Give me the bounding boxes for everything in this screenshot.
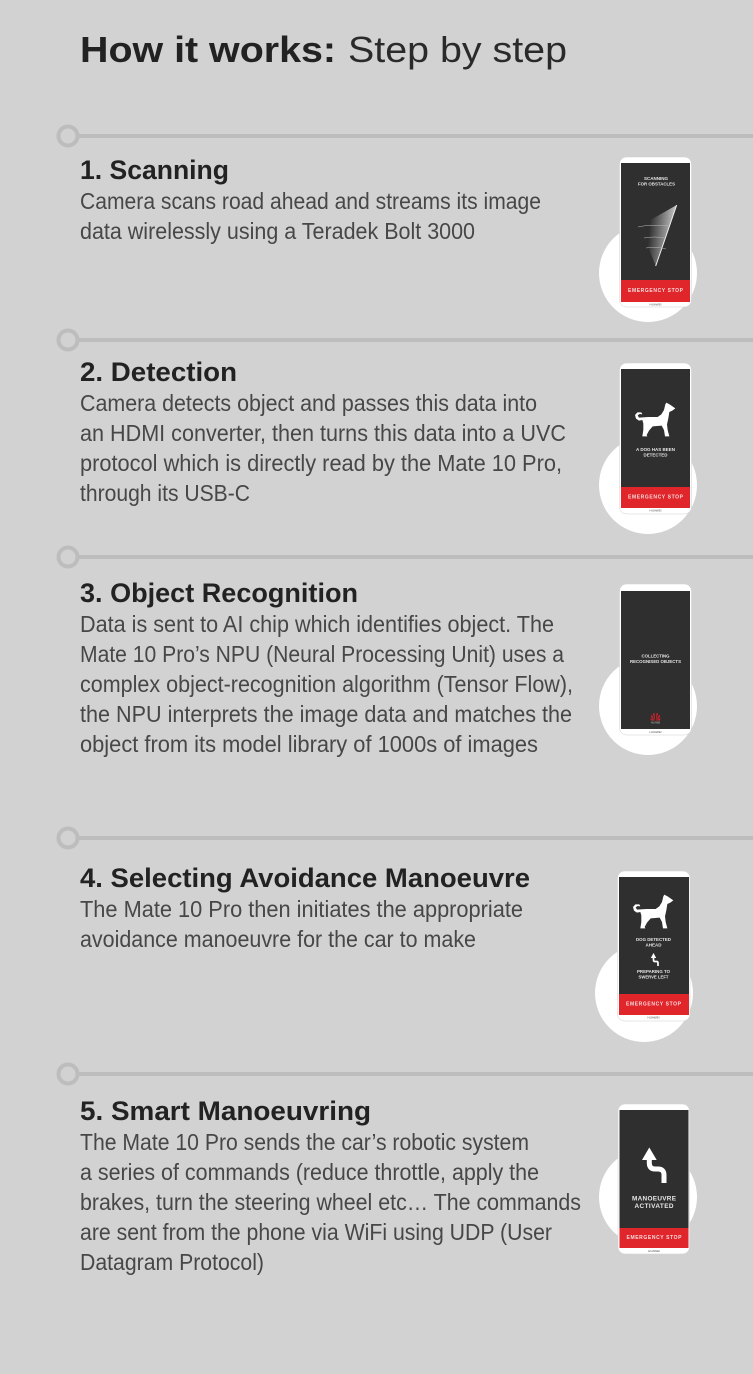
text block: step 2: through its USB-C xyxy=(80,480,250,506)
heading: 5. Smart Manoeuvring: 5. Smart Manoeuvring xyxy=(80,1096,371,1126)
title: Step by step xyxy=(348,29,567,70)
text block: step 2: protocol which is directly read by the Mate 10 Pro, xyxy=(80,450,562,476)
timeline marker 4 xyxy=(58,828,753,848)
icon: phone preparing to swerve left: HUAWEI xyxy=(648,1016,660,1020)
timeline marker 5 xyxy=(58,1064,753,1084)
title xyxy=(80,29,567,70)
icon: phone preparing to swerve left: PREPARING TO xyxy=(637,969,671,974)
icon: phone manoeuvre activated: EMERGENCY STOP xyxy=(626,1235,682,1241)
icon: phone dog detected: EMERGENCY STOP xyxy=(628,494,684,500)
text block: step 1: data wirelessly using a Teradek Bolt 3000 xyxy=(80,218,475,244)
icon: dog xyxy=(635,403,675,436)
text block: step 1: Camera scans road ahead and streams its image xyxy=(80,188,541,214)
timeline marker 1 xyxy=(58,126,753,146)
icon: phone dog detected xyxy=(599,363,697,534)
text block: step 5: The Mate 10 Pro sends the car’s robotic system xyxy=(80,1129,529,1155)
text block: step 5 xyxy=(80,1129,581,1275)
icon: phone collecting recognised objects: HUAWEI xyxy=(651,722,661,724)
text block: step 3: Data is sent to AI chip which identifies object. The xyxy=(80,611,554,637)
text block: step 3: complex object-recognition algorithm (Tensor Flow), xyxy=(80,671,573,697)
icon: Huawei logo xyxy=(650,713,660,720)
icon: phone preparing to swerve left: EMERGENCY STOP xyxy=(626,1002,682,1008)
icon: small swerve arrow xyxy=(651,953,658,966)
text block: step 3: the NPU interprets the image data and matches the xyxy=(80,701,572,727)
icon: phone collecting recognised objects: RECOGNISED OBJECTS xyxy=(630,659,681,664)
icon: phone scanning for obstacles: FOR OBSTACLES xyxy=(638,182,675,186)
heading: 4. Selecting Avoidance Manoeuvre: 4. Selecting Avoidance Manoeuvre xyxy=(80,863,530,893)
icon: phone scanning for obstacles: HUAWEI xyxy=(650,302,662,306)
text block: step 1 xyxy=(80,188,541,244)
icon: phone collecting recognised objects: COLLECTING xyxy=(642,654,670,658)
icon: phone dog detected: HUAWEI xyxy=(650,508,662,512)
text block: step 4 xyxy=(80,896,523,952)
icon: phone scanning for obstacles: SCANNING xyxy=(644,176,668,181)
heading: 2. Detection: 2. Detection xyxy=(80,357,237,387)
timeline marker 2 xyxy=(58,330,753,350)
text block: step 5: brakes, turn the steering wheel etc… The commands xyxy=(80,1189,581,1215)
icon: phone collecting recognised objects xyxy=(599,584,697,755)
text block: step 2: an HDMI converter, then turns this data into a UVC xyxy=(80,420,566,446)
icon: phone manoeuvre activated: ACTIVATED xyxy=(634,1203,674,1210)
timeline marker 3 xyxy=(58,548,753,566)
heading: 1. Scanning: 1. Scanning xyxy=(80,155,229,185)
text block: step 4: avoidance manoeuvre for the car to make xyxy=(80,926,476,952)
icon: phone dog detected: DETECTED xyxy=(644,452,668,458)
text block: step 2: Camera detects object and passes this data into xyxy=(80,390,537,416)
text block: step 4: The Mate 10 Pro then initiates the appropriate xyxy=(80,896,523,922)
icon: phone manoeuvre activated xyxy=(599,1104,697,1254)
icon: phone preparing to swerve left: AHEAD xyxy=(646,942,662,948)
icon: swerve arrow xyxy=(642,1148,664,1183)
icon: phone scanning for obstacles: EMERGENCY STOP xyxy=(628,288,684,294)
panel: step 5 smart manoeuvring xyxy=(58,1064,753,1275)
panel: step 4 selecting avoidance manoeuvre xyxy=(58,828,753,1042)
text block: step 3: object from its model library of 1000s of images xyxy=(80,731,538,757)
heading: 3. Object Recognition: 3. Object Recognition xyxy=(80,578,358,608)
icon: phone preparing to swerve left: DOG DETECTED xyxy=(636,937,671,942)
icon: phone collecting recognised objects: HUAWEI xyxy=(650,730,662,734)
panel: step 2 detection xyxy=(58,330,753,534)
icon: phone preparing to swerve left xyxy=(595,871,693,1042)
icon: phone manoeuvre activated: MANOEUVRE xyxy=(632,1196,677,1202)
icon: phone dog detected: A DOG HAS BEEN xyxy=(636,447,675,452)
text block: step 5: a series of commands (reduce throttle, apply the xyxy=(80,1159,539,1185)
panel: step 3 object recognition xyxy=(58,548,753,757)
icon: dog xyxy=(633,895,673,928)
text block: step 5: are sent from the phone via WiFi using UDP (User xyxy=(80,1219,552,1245)
text block: step 3 xyxy=(80,611,573,757)
icon: phone scanning for obstacles xyxy=(599,157,697,322)
text block: step 2 xyxy=(80,390,566,506)
title: How it works: xyxy=(80,29,336,70)
text block: step 5: Datagram Protocol) xyxy=(80,1249,264,1275)
icon: phone preparing to swerve left: SWERVE LEFT xyxy=(638,974,669,980)
panel: step 1 scanning xyxy=(58,126,753,322)
icon: phone manoeuvre activated: HUAWEI xyxy=(648,1249,660,1253)
text block: step 3: Mate 10 Pro’s NPU (Neural Processing Unit) uses a xyxy=(80,641,565,667)
